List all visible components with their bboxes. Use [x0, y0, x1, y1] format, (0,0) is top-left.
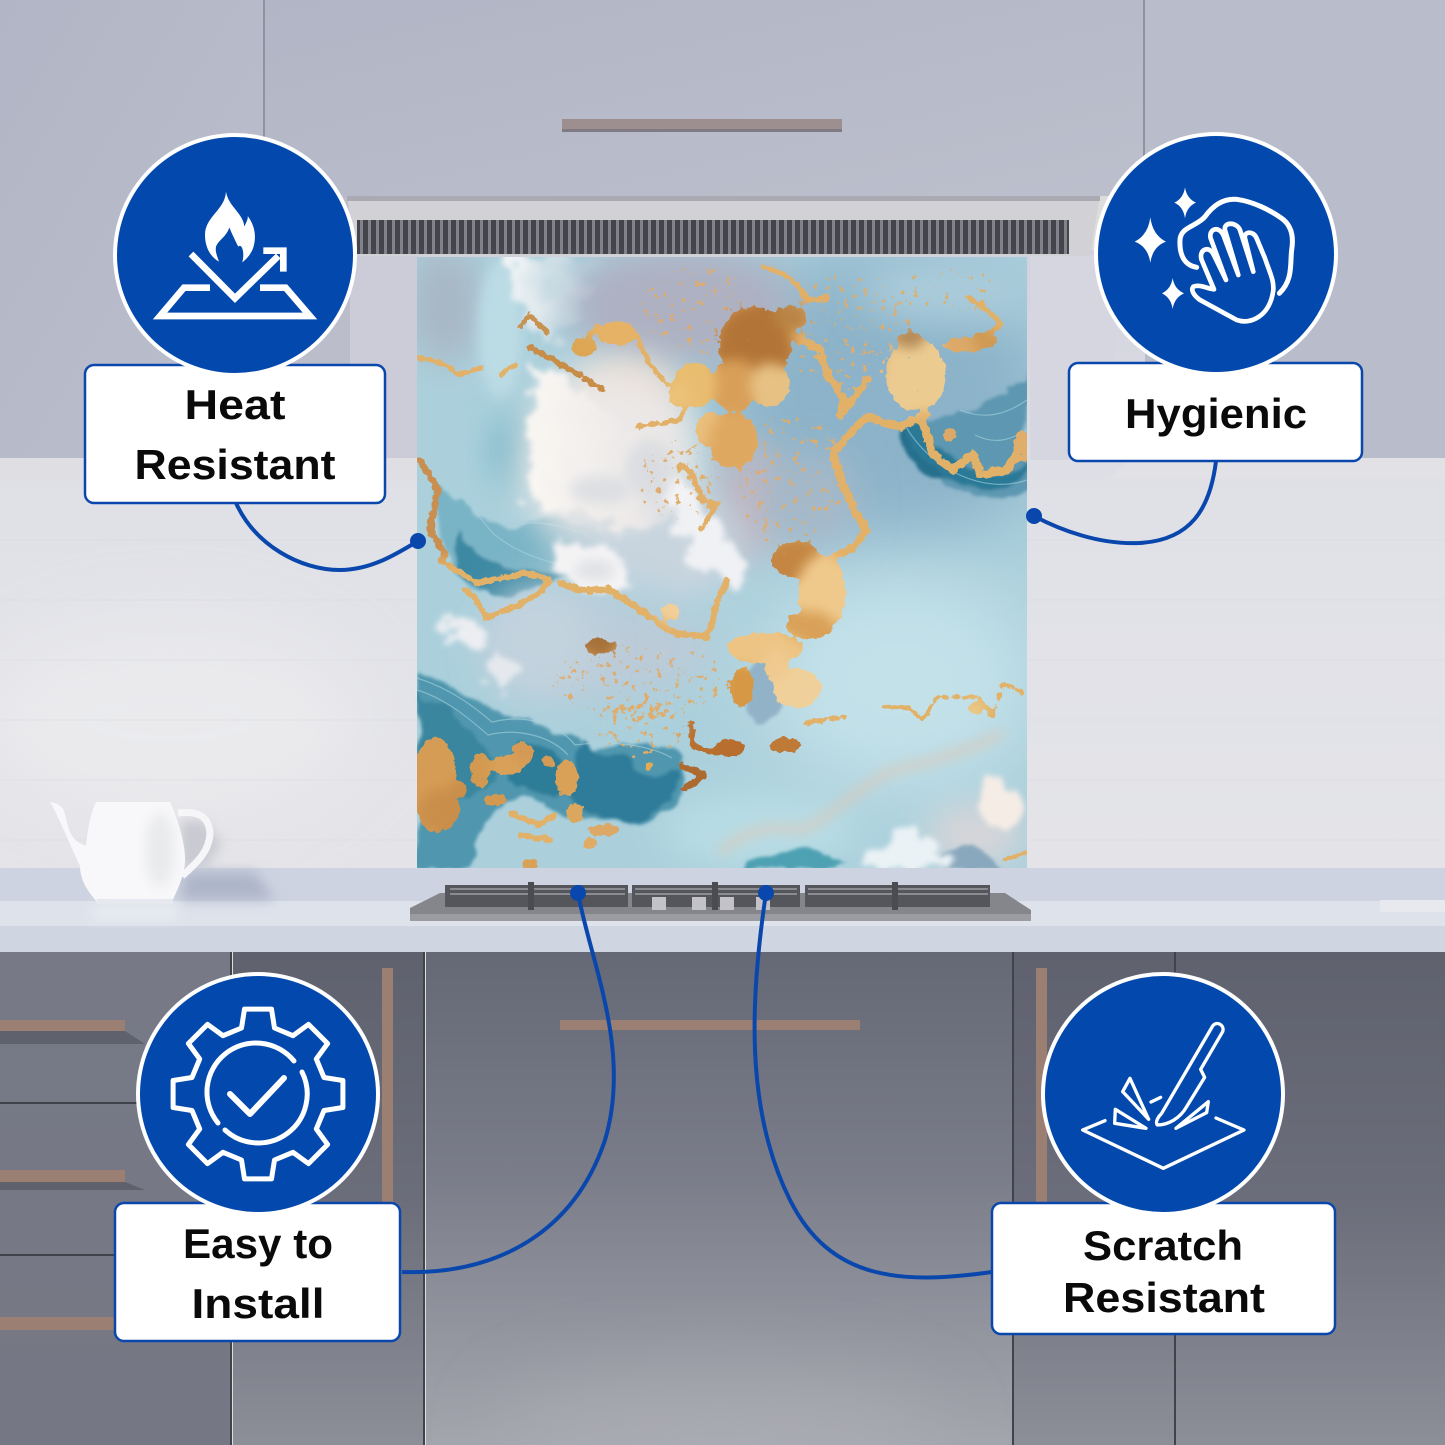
- speckle clouds: [550, 265, 1000, 760]
- callout: easy to install: [115, 972, 400, 1341]
- connector: heat resistant: [236, 503, 426, 570]
- callout: hygienic: [1069, 132, 1362, 461]
- cabinet handles: [0, 968, 1047, 1330]
- cloud shading: [570, 440, 675, 580]
- handle: [178, 812, 210, 876]
- soft tones: [407, 245, 1055, 870]
- callout: heat resistant: Resistant: [134, 441, 336, 488]
- connector: hygienic: [1026, 461, 1216, 543]
- worktop: [0, 868, 1445, 952]
- badge circle: [113, 133, 357, 377]
- fine veins: [417, 267, 1027, 860]
- extractor hood: [347, 196, 1100, 256]
- callout: easy to install: Install: [192, 1280, 324, 1327]
- white clouds: [485, 370, 740, 695]
- label box: [992, 1203, 1335, 1334]
- heading: Heat: [184, 381, 286, 428]
- connector: easy to install: [402, 885, 614, 1272]
- icon: gear with check: [173, 1009, 343, 1179]
- agate lines: [417, 400, 1027, 758]
- label box: [85, 365, 385, 503]
- teal veins: [417, 375, 1027, 868]
- soft peach vein: [720, 733, 1003, 853]
- icon: flame on surface: [160, 192, 310, 316]
- lower cabinets: [0, 952, 1445, 1445]
- badge circle: [1094, 132, 1338, 376]
- marble splashback panel: [407, 245, 1055, 870]
- icon: hand wiping with sparkles: [1135, 187, 1292, 321]
- badge circle: [136, 972, 380, 1216]
- teapot shadow: [180, 820, 222, 868]
- icon: knife scratching surface: [1083, 1024, 1244, 1168]
- heading: Hygienic: [1125, 390, 1307, 437]
- body and spout: [50, 802, 185, 902]
- callout: heat resistant: [85, 133, 385, 503]
- label box: [1069, 363, 1362, 461]
- reflection: [92, 906, 178, 920]
- heading: Easy to: [183, 1220, 333, 1267]
- tiled wall: [0, 250, 1445, 875]
- connector: scratch resistant: [755, 885, 992, 1277]
- badge circle: [1041, 972, 1285, 1216]
- large patches: [413, 306, 1031, 870]
- cooktop: [410, 882, 1031, 921]
- callout: scratch resistant: [992, 972, 1335, 1334]
- upper cabinets: [0, 0, 1445, 458]
- callout: scratch resistant: Resistant: [1063, 1274, 1265, 1321]
- upper handle: [562, 119, 842, 132]
- teapot: [50, 802, 275, 920]
- gold veins and patches: [413, 265, 1031, 870]
- label box: [115, 1203, 400, 1341]
- heading: Scratch: [1083, 1222, 1243, 1269]
- shelf undersides: [0, 458, 417, 479]
